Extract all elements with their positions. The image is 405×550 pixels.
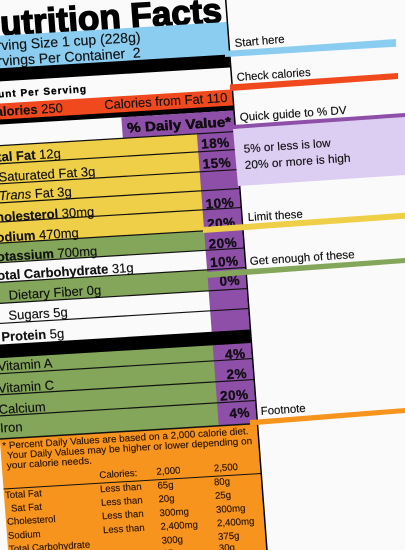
footnote panel: 300mg xyxy=(159,507,189,519)
footnote panel: 2,400mg xyxy=(217,516,255,529)
percent daily value column xyxy=(121,111,257,430)
footnote panel xyxy=(0,424,267,550)
nutrient names: Protein 5g xyxy=(1,326,65,344)
footnote panel: Calories: xyxy=(99,468,138,481)
footnote panel: * Percent Daily Values are based on a 2,000 calorie diet. xyxy=(2,426,249,452)
callout: footnote: Footnote xyxy=(260,403,306,418)
footnote panel: Total Fat xyxy=(5,488,43,501)
footnote panel: 300g xyxy=(161,535,183,547)
footnote panel: Sodium xyxy=(8,529,41,542)
nutrient names xyxy=(0,149,133,432)
percent values: 10% xyxy=(209,253,239,270)
footnote panel: Cholesterol xyxy=(7,514,56,528)
callout: start here: Start here xyxy=(234,34,285,50)
percent daily value column: % Daily Value* xyxy=(127,114,233,135)
footnote panel: 65g xyxy=(157,480,174,492)
nutrient names: Saturated Fat 3g xyxy=(0,164,96,185)
footnote panel: Less than xyxy=(102,509,144,522)
label background xyxy=(0,0,265,550)
percent values: 0% xyxy=(219,273,241,289)
footnote panel: 25g xyxy=(215,490,231,502)
percent values: 4% xyxy=(229,405,250,421)
footnote panel: 375g xyxy=(218,531,240,543)
green row potassium xyxy=(0,231,207,264)
black band under calories xyxy=(0,106,234,124)
callout: get enough of these: Get enough of these xyxy=(249,249,355,268)
callout: footnote xyxy=(250,403,405,426)
footnote panel: 2,500 xyxy=(214,462,238,474)
footnote panel: Less than xyxy=(103,523,145,536)
callout: limit these: Limit these xyxy=(247,209,303,224)
footnote panel: Sat Fat xyxy=(11,502,43,515)
percent values: 15% xyxy=(202,155,232,172)
percent values: 10% xyxy=(205,195,235,212)
percent values: 20% xyxy=(207,215,236,232)
callout: quick guide to percent daily value: 5% or less is low xyxy=(243,138,332,156)
nutrition label xyxy=(0,0,267,550)
yellow rows xyxy=(0,134,205,245)
footnote panel: 2,000 xyxy=(156,465,181,478)
callout: check calories xyxy=(230,67,398,91)
label right border xyxy=(226,0,267,550)
callout: start here xyxy=(225,34,396,57)
callout: get enough of these xyxy=(206,249,405,278)
percent values: 20% xyxy=(208,235,238,252)
green rows vitamins xyxy=(0,345,220,440)
nutrient names: Dietary Fiber 0g xyxy=(8,282,102,303)
percent values xyxy=(201,135,250,422)
callout: limit these xyxy=(203,209,405,233)
protein black band xyxy=(0,330,251,359)
calories row: Calories from Fat 110 xyxy=(104,90,228,112)
footnote panel: Less than xyxy=(101,495,143,509)
footnote panel: 300mg xyxy=(216,503,246,516)
footnote panel: your calorie needs. xyxy=(6,456,92,472)
footnote panel: 80g xyxy=(214,476,230,488)
footnote panel: 20g xyxy=(158,493,175,505)
nutrient names: Sugars 5g xyxy=(8,304,68,323)
row divider lines xyxy=(0,132,255,417)
percent values: 20% xyxy=(220,387,249,404)
nutrient names: Iron xyxy=(0,419,23,436)
nutrient names: Trans Fat 3g xyxy=(0,184,72,203)
footnote panel: Less than xyxy=(100,482,142,495)
callout: quick guide to percent daily value xyxy=(233,105,405,186)
callout: check calories: Check calories xyxy=(236,67,311,84)
percent values: 4% xyxy=(224,346,246,362)
callout: quick guide to percent daily value: 20% or more is high xyxy=(244,153,351,172)
footnote panel: 2,400mg xyxy=(160,520,198,533)
percent values: 18% xyxy=(201,135,230,152)
callout: quick guide to percent daily value: Quick guide to % DV xyxy=(239,105,347,124)
calories row xyxy=(0,90,233,123)
footnote panel: Your Daily Values may be higher or lower depending on xyxy=(7,436,252,462)
green row dietary fiber xyxy=(0,270,210,305)
thick black band xyxy=(0,55,230,84)
serving section xyxy=(0,22,229,71)
percent values: 2% xyxy=(226,366,248,382)
